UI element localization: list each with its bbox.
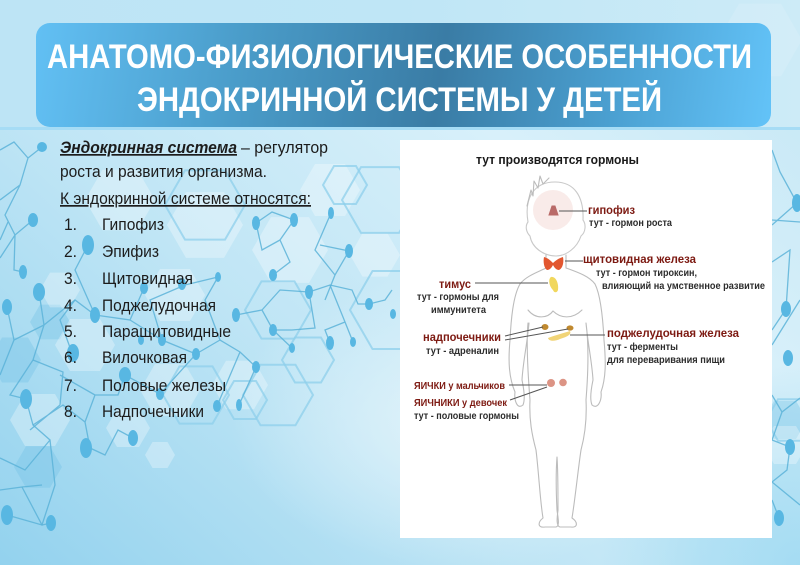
numbered list of glands: Вилочковая xyxy=(102,348,187,367)
label: pituitary xyxy=(588,203,672,229)
organ: pancreas xyxy=(548,331,570,341)
organ: thyroid xyxy=(544,257,563,270)
organs: adrenal glands xyxy=(542,324,574,331)
numbered list of glands xyxy=(64,215,231,421)
numbered list of glands: 3. xyxy=(64,269,77,288)
label: gonads: тут - половые гормоны xyxy=(414,410,519,422)
numbered list of glands: 1. xyxy=(64,215,77,234)
definition: роста и развития организма. xyxy=(60,162,267,181)
label: thyroid: влияющий на умственное развитие xyxy=(602,280,765,292)
numbered list of glands: Эпифиз xyxy=(102,242,159,261)
definition xyxy=(60,138,328,181)
numbered list of glands: 4. xyxy=(64,296,77,315)
numbered list of glands: 2. xyxy=(64,242,77,261)
numbered list of glands: 5. xyxy=(64,322,77,341)
label: pituitary: гипофиз xyxy=(588,203,635,217)
numbered list of glands: Паращитовидные xyxy=(102,322,231,341)
label: thyroid: щитовидная железа xyxy=(583,252,696,266)
label: pituitary: тут - гормон роста xyxy=(589,217,672,229)
panel: endocrine diagram xyxy=(400,140,772,538)
numbered list of glands: Половые железы xyxy=(102,376,226,395)
label: adrenal glands: надпочечники xyxy=(423,330,501,344)
label: adrenal glands xyxy=(423,330,501,357)
leader lines xyxy=(475,211,605,400)
numbered list of glands: 7. xyxy=(64,376,77,395)
numbered list of glands: Гипофиз xyxy=(102,215,164,234)
label: gonads xyxy=(414,380,519,422)
organ: thymus xyxy=(549,277,558,292)
definition: – регулятор xyxy=(241,138,328,157)
numbered list of glands: 8. xyxy=(64,402,77,421)
definition: Эндокринная система xyxy=(60,138,237,157)
label: thymus: тут - гормоны для xyxy=(417,291,499,303)
text block: definition and list xyxy=(60,138,328,421)
label: pancreas xyxy=(607,326,739,366)
label: thymus: иммунитета xyxy=(431,304,486,316)
label: thymus xyxy=(417,277,499,316)
label: pancreas: тут - ферменты xyxy=(607,341,678,353)
numbered list of glands: Щитовидная xyxy=(102,269,193,288)
list heading: К эндокринной системе относятся: xyxy=(60,189,311,208)
molecular network xyxy=(0,142,800,531)
organ: pituitary xyxy=(533,190,573,230)
label: pancreas: для переваривания пищи xyxy=(607,354,725,366)
label: adrenal glands: тут - адреналин xyxy=(426,345,499,357)
diagram heading: тут производятся гормоны xyxy=(476,153,639,167)
numbered list of glands: 6. xyxy=(64,348,77,367)
label: pancreas: поджелудочная железа xyxy=(607,326,739,340)
numbered list of glands: Надпочечники xyxy=(102,402,204,421)
label: thyroid: тут - гормон тироксин, xyxy=(596,267,697,279)
title text xyxy=(47,38,752,119)
title text: ЭНДОКРИННОЙ СИСТЕМЫ У ДЕТЕЙ xyxy=(137,80,662,119)
pale hexagon pattern xyxy=(0,164,800,488)
label: gonads: ЯИЧКИ у мальчиков xyxy=(414,380,505,392)
label: gonads: ЯИЧНИКИ у девочек xyxy=(414,397,508,409)
organs: gonads xyxy=(547,379,567,387)
title banner xyxy=(36,23,771,127)
label: thyroid xyxy=(583,252,765,292)
label: thymus: тимус xyxy=(439,277,471,291)
child body outline xyxy=(509,176,605,527)
numbered list of glands: Поджелудочная xyxy=(102,296,216,315)
